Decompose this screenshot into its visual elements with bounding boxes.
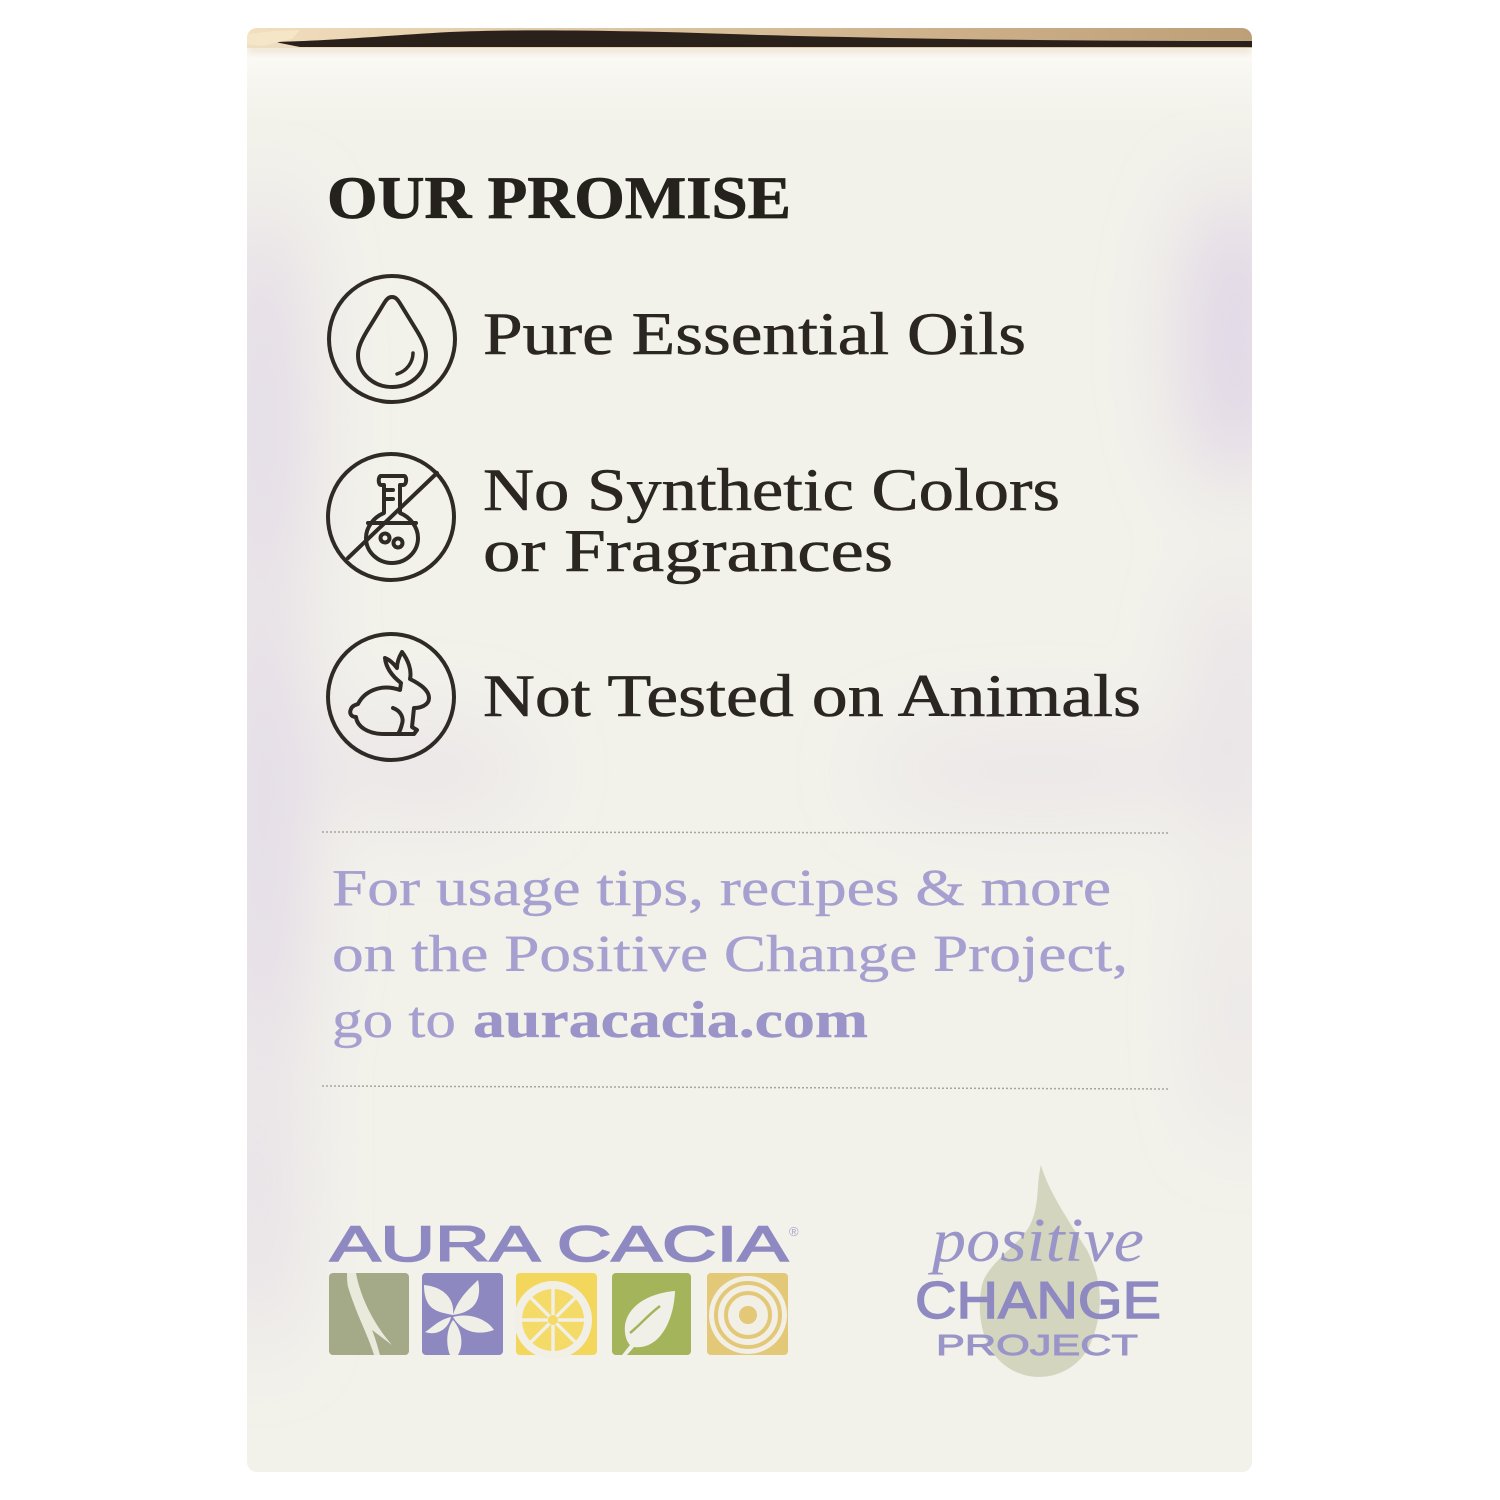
text: usage tips: on the Positive Change Project,: [332, 926, 1128, 983]
text: no synthetic colors or fragrances: [483, 457, 1060, 584]
icon: herb tile: [422, 1273, 503, 1355]
text: not tested on animals: Not Tested on Animals: [483, 663, 1141, 729]
icon: root tile: [329, 1273, 409, 1355]
logo: positive change project: [915, 1165, 1161, 1377]
registered mark: ®: [789, 1224, 799, 1239]
icon: water drop: [329, 276, 455, 402]
logo project: PROJECT: [936, 1330, 1138, 1362]
text: usage tips: go to: [332, 992, 456, 1049]
icon: rings tile: [707, 1273, 788, 1355]
text: no synthetic colors or fragrances: or Fragrances: [483, 518, 893, 584]
text: no synthetic colors or fragrances: No Synthetic Colors: [483, 457, 1060, 523]
logo: aura cacia: [329, 1216, 799, 1359]
text: pure essential oils: Pure Essential Oils: [483, 301, 1026, 367]
logo script: positive: [928, 1207, 1144, 1275]
icon: leaf tile: [612, 1273, 691, 1355]
top edge flap: [247, 28, 1252, 52]
text: usage tips: auracacia.com: [473, 992, 868, 1049]
heading: our promise: OUR PROMISE: [327, 165, 791, 231]
text: usage tips: [332, 860, 1128, 1049]
divider: lower dotted: [322, 1086, 1168, 1089]
icon: no synthetic flask: [328, 454, 454, 580]
icon: rabbit: [328, 634, 454, 760]
divider: upper dotted: [322, 832, 1170, 833]
logo drop: [980, 1165, 1100, 1377]
panel: box side: [227, 28, 1285, 1472]
text: usage tips: For usage tips, recipes & more: [332, 860, 1111, 917]
icon: citrus tile: [514, 1273, 597, 1359]
logo change: CHANGE: [915, 1272, 1161, 1330]
logo wordmark: AURA CACIA: [330, 1216, 789, 1272]
